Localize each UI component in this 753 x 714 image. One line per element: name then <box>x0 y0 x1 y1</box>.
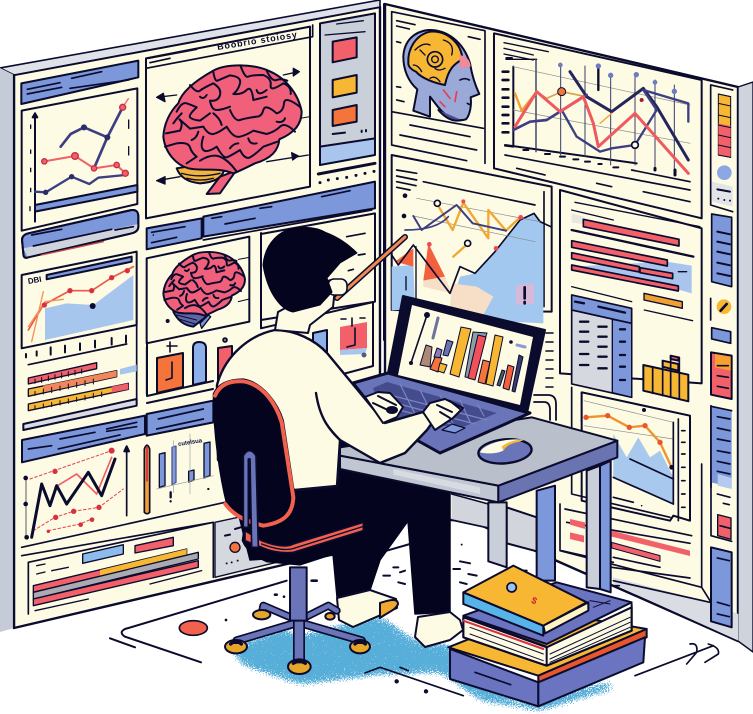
zigzag line chart <box>23 446 129 540</box>
sidebar: yellow dial and blue tab <box>711 298 731 367</box>
panel: colour swatch sidebar <box>320 13 375 165</box>
vertical gauge bar <box>144 445 150 514</box>
icon: large brain <box>163 65 302 194</box>
left wall <box>0 0 380 632</box>
panel: blue chart header <box>21 61 138 104</box>
laptop <box>353 296 545 453</box>
chart caption: cutelsua <box>178 438 203 448</box>
chair base <box>225 606 370 674</box>
desk back rails <box>452 494 488 528</box>
right hand <box>423 399 463 430</box>
left wall panels, lower <box>22 321 277 614</box>
laptop base and keyboard <box>353 373 530 453</box>
blue bar <box>193 342 206 385</box>
red bar <box>218 346 232 390</box>
right wall panels, upper <box>392 12 733 397</box>
torso and arm in shirt <box>217 227 463 490</box>
panel: blue caption pill <box>22 210 138 258</box>
sidebar: blue tab bottom <box>711 547 732 627</box>
panel: multi-series line chart <box>494 33 702 218</box>
row of small dots <box>318 163 375 183</box>
orange bar <box>157 353 183 393</box>
caption lines panel <box>22 502 225 614</box>
top book <box>463 566 588 636</box>
chair stem <box>290 567 307 621</box>
sidebar: blue list and red tab <box>711 406 732 541</box>
blue caption bar <box>22 401 213 462</box>
panel: bar chart below small brain <box>147 325 250 403</box>
floor: stippled blue shadow <box>226 612 622 714</box>
panel title: Boobrio stoiosy <box>216 29 298 52</box>
neck and face <box>275 285 335 333</box>
bottom book <box>448 611 647 706</box>
panel: data table <box>572 295 632 397</box>
panel: area and orange line chart <box>572 387 690 521</box>
chair back <box>213 379 295 527</box>
marker: red floor dot <box>179 621 207 635</box>
sidebar: blue list <box>712 214 732 287</box>
horizontal stacked bars <box>28 363 137 411</box>
panel: multi-line chart <box>22 88 137 231</box>
screen bar chart <box>409 312 525 392</box>
sidebar: yellow legend <box>711 85 733 212</box>
top book: $ <box>530 595 539 607</box>
panel: chart behind analyst <box>261 213 375 328</box>
shirt <box>217 330 432 490</box>
grey wall base <box>613 577 738 641</box>
panel: small brain diagram <box>147 237 249 343</box>
desk top <box>340 417 617 502</box>
tick marks right of laptop <box>534 333 556 420</box>
grey control box <box>215 514 277 577</box>
desk leg grey back <box>587 461 611 592</box>
panel: area chart with red line: DBI <box>27 275 42 286</box>
panel: head profile <box>392 12 485 163</box>
right wall <box>384 4 753 652</box>
trousers and seated body <box>225 441 450 614</box>
analyst <box>213 227 545 674</box>
yellow bar chart <box>643 356 688 401</box>
panel: lower red bars <box>560 464 710 602</box>
stack of books <box>448 566 647 706</box>
panel: area chart with red line <box>22 252 137 348</box>
sidebar: red and yellow legend <box>711 352 732 399</box>
glasses <box>319 278 347 295</box>
grey caption bar <box>23 399 137 430</box>
chair post <box>243 451 258 547</box>
panel: horizontal bar panel <box>560 190 702 383</box>
panel: mountain area chart <box>392 155 552 323</box>
small blue bar chart <box>157 434 213 501</box>
panel: large brain diagram <box>146 25 313 218</box>
office chair <box>213 379 377 674</box>
floor: mat outline <box>110 581 380 673</box>
middle book <box>463 582 632 666</box>
chair seat <box>242 519 377 566</box>
panel: bars behind analyst head <box>261 233 373 374</box>
feet <box>337 590 463 647</box>
mouse <box>477 437 533 466</box>
left hand <box>365 392 403 423</box>
desk leg grey front <box>488 502 507 567</box>
panel: blue section header <box>147 182 375 249</box>
left wall panels, upper <box>21 13 375 348</box>
hair <box>263 227 357 312</box>
bar row: axis ticks <box>26 336 126 357</box>
desk leg blue <box>537 486 555 581</box>
laptop screen <box>388 296 545 413</box>
desk <box>340 417 617 592</box>
pencil pointer <box>337 237 405 298</box>
icon: head with brain <box>403 30 479 121</box>
right wall panels, lower <box>560 352 738 641</box>
